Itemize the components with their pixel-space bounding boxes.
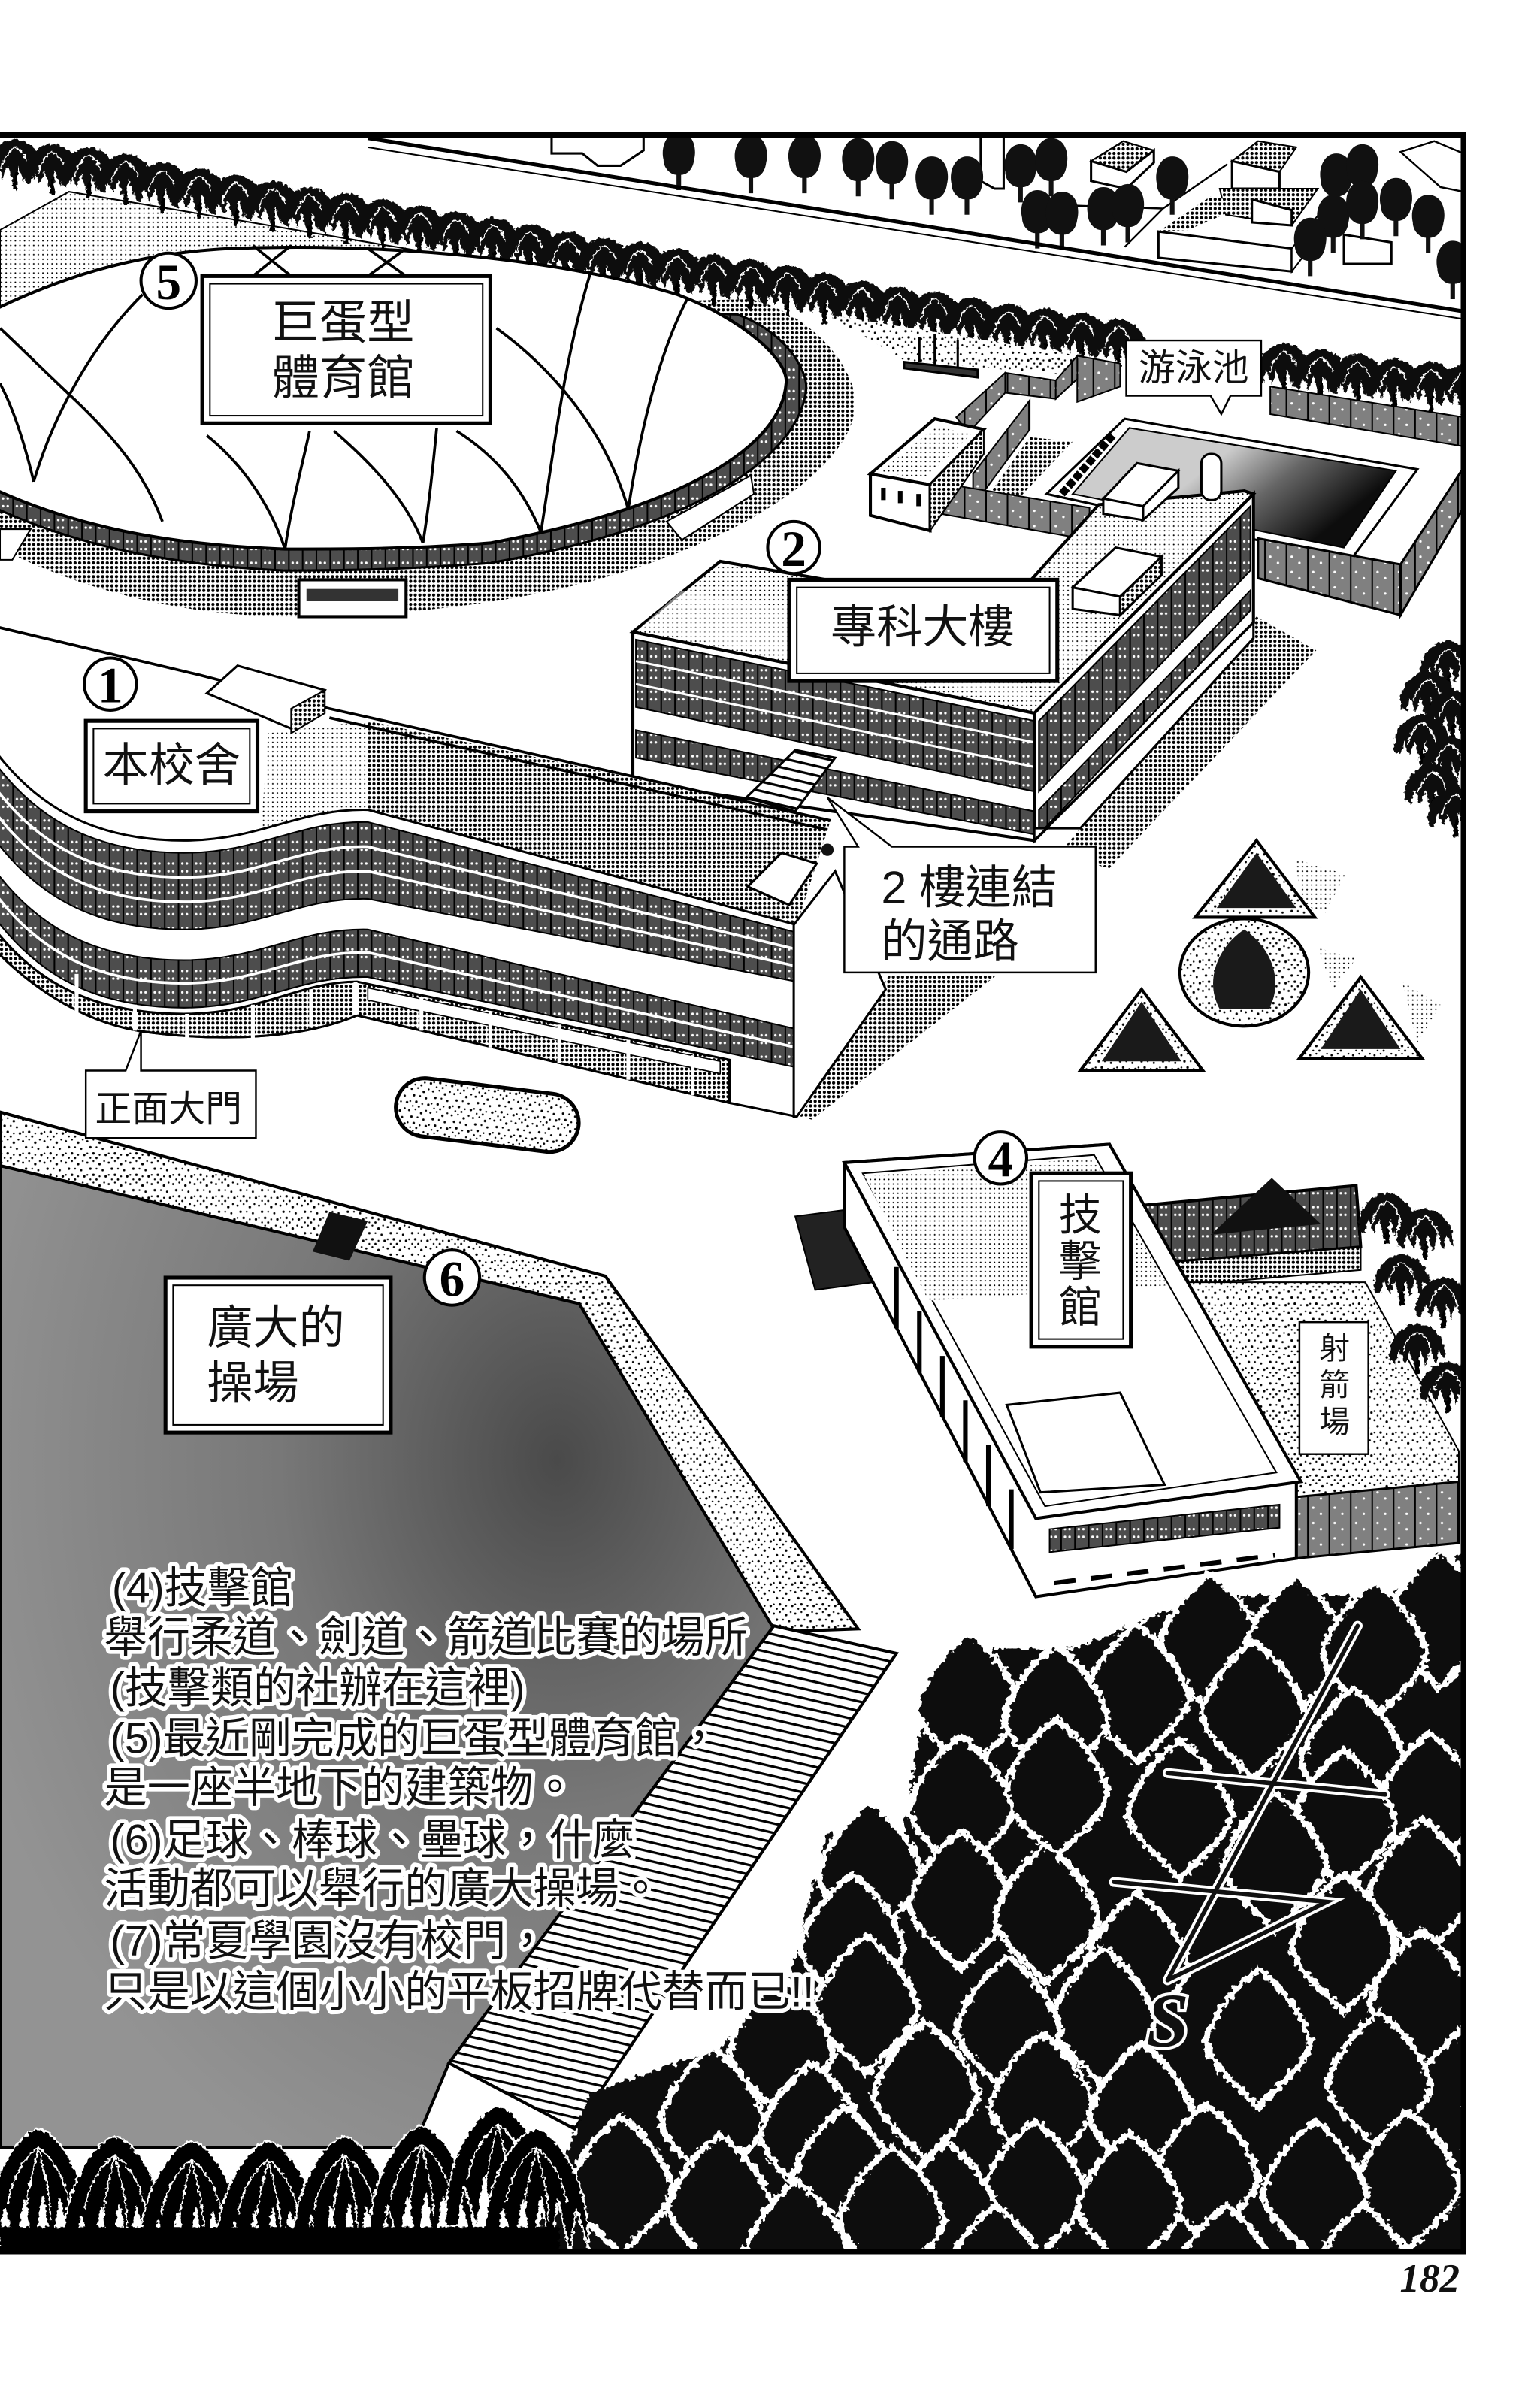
roof [633,491,1254,713]
number 1 [84,658,136,714]
building 1: main school building [0,626,885,1117]
facade [0,737,797,1117]
label: archery range: 場 [1319,1405,1350,1439]
callout: front gate: 正面大門 [95,1089,242,1130]
dome roof [0,247,786,549]
caption text on the field: 是一座半地下的建築物。 [104,1764,576,1812]
road lines [368,138,1463,319]
hall roof [844,1144,1301,1518]
number 2: 2 [781,521,806,577]
rooftop structure [207,666,325,728]
swimming pool compound [827,314,1491,615]
label: martial arts hall [1031,1173,1131,1347]
label: archery range: 箭 [1319,1368,1350,1402]
gymnasium ground apron [0,299,855,616]
callout: second floor passage [827,797,1096,973]
label: large field: 操場 [207,1357,299,1408]
caption text on the field: (技擊類的社辦在這裡) [110,1664,525,1712]
hedge [392,1075,582,1155]
caption text on the field: 活動都可以舉行的廣大操場。 [104,1865,662,1913]
label: main building: 本校舍 [103,740,241,791]
number 2 [767,521,820,577]
side facade [1034,494,1254,840]
caption text on the field: (6)足球、棒球、壘球，什麼 [110,1816,634,1864]
bleachers [449,1626,897,2129]
planter shadows [1295,859,1440,1043]
roof grey part [314,721,831,925]
label: large field: 廣大的 [207,1302,345,1354]
archery yard [1178,1282,1459,1497]
palm row behind dome [0,140,1146,370]
martial arts hall [795,1144,1476,1596]
yard fence [1296,1481,1459,1558]
callout: second floor passage: 2 樓連結 [881,862,1057,913]
end wall [794,871,885,1117]
hall walls [844,1144,1296,1596]
dome: egg-shaped gymnasium [0,246,806,616]
building 2: specialty building [633,454,1254,840]
cylinder tank [1201,454,1221,500]
right edge palm trees [1394,641,1484,837]
label: martial arts hall: 館 [1059,1284,1102,1332]
label: martial arts hall: 擊 [1059,1238,1102,1286]
caption text on the field: 舉行柔道、劍道、箭道比賽的場所 [104,1614,748,1662]
number 5: 5 [156,254,181,310]
label: large field [165,1278,391,1432]
caption text on the field: (4)技擊館 [112,1565,293,1613]
callout: swimming pool [1127,340,1261,414]
rooftop boxes [1103,463,1178,520]
caption text on the field: (5)最近剛完成的巨蛋型體育館， [110,1715,721,1763]
dome entrance [299,579,406,616]
neighborhood houses and trees [552,132,1469,299]
bottom palm row [0,2106,588,2267]
planter triangle right [1299,977,1422,1058]
callout: second floor passage: 的通路 [881,915,1019,967]
field border [0,1112,858,1632]
number 6 [425,1250,480,1307]
connecting stairs [746,750,835,812]
rear palms [1262,343,1461,416]
planter circle [1180,918,1309,1026]
sports field [0,1112,897,2147]
label: martial arts hall: 技 [1059,1192,1102,1240]
pool frame [1047,419,1417,557]
callout: front gate [86,1030,256,1138]
label: specialty building: 專科大樓 [831,601,1015,652]
label: specialty building [789,579,1057,681]
annex [870,419,984,485]
front facade [633,632,1034,840]
pool row of boxes [1062,434,1114,494]
side palms [1359,1193,1476,1413]
building 2 shadow [1057,616,1316,868]
label: dome gymnasium [202,276,490,423]
compass letter S: S [1146,1978,1189,2063]
number 6: 6 [440,1251,464,1307]
caption text on the field [104,1565,815,2016]
field surface [0,1166,774,2147]
fences [1270,386,1463,446]
building 1 shadow [800,976,996,1120]
lower level [1034,623,1254,840]
hall front windows [1050,1505,1279,1552]
page number: 182 [1399,2257,1460,2301]
building behind the dome [0,192,460,307]
number 4: 4 [988,1131,1013,1187]
compass [1114,1626,1385,2063]
forest [528,1550,1491,2343]
label: dome gymnasium: 體育館 [272,352,414,404]
caption text on the field: (7)常夏學園沒有校門， [110,1917,549,1965]
number 1: 1 [98,658,123,714]
label: dome gymnasium: 巨蛋型 [272,297,414,349]
label: main building [86,721,258,812]
label: archery range [1299,1322,1369,1454]
planter triangle top [1195,840,1315,917]
traditional building [1140,1186,1360,1263]
dome ring [0,307,806,570]
number 4 [975,1131,1027,1187]
small steps [313,1212,368,1261]
planter triangle left [1080,989,1203,1070]
callout: swimming pool: 游泳池 [1139,348,1249,389]
pool walls [942,486,1091,537]
water [1073,428,1396,548]
planters with trees [1080,840,1440,1070]
small dark annex [795,1209,873,1290]
roof white part [0,626,831,925]
dome ribs [0,246,688,549]
caption text on the field: 只是以這個小小的平板招牌代替而已!! [104,1968,815,2016]
stippled ground and pump [827,314,1080,376]
label: archery range: 射 [1319,1331,1350,1366]
number 5 [141,253,196,310]
